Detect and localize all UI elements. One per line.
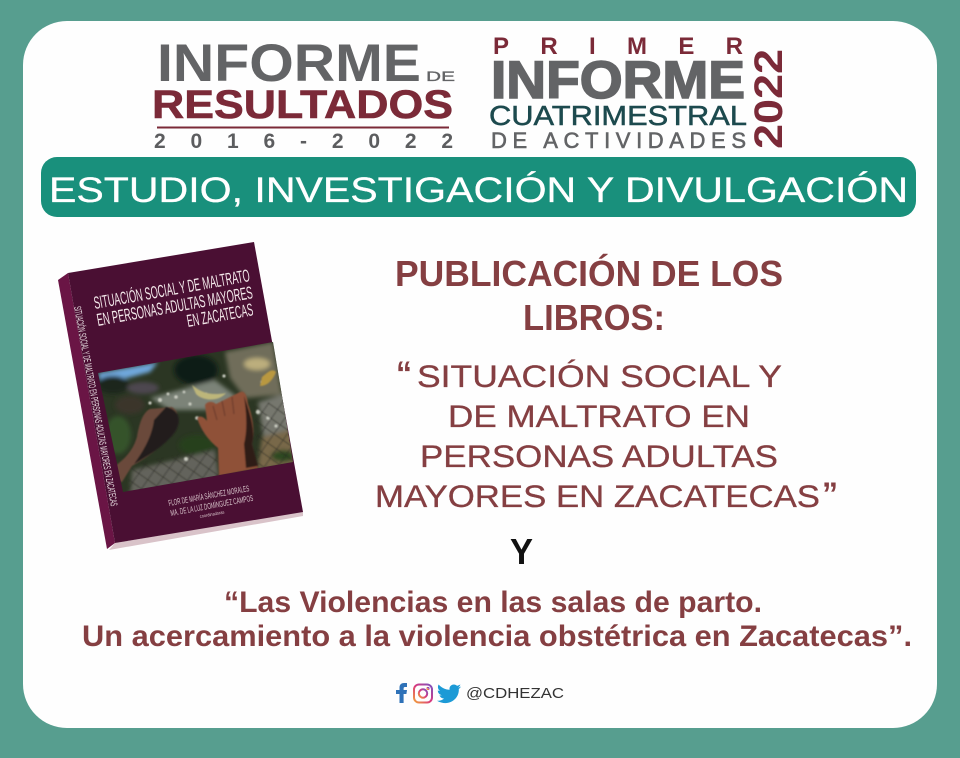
leaf [192,385,226,400]
logo: primer informe cuatrimestral [489,33,791,153]
left hand [114,407,178,482]
book title one: PERSONAS ADULTAS [420,438,778,474]
logo: informe de resultados [152,34,455,153]
right hand [197,392,258,476]
book authors [168,483,254,519]
book cover: SITUACIÓN SOCIAL Y DE MALTRATO EN PERSONAS ADULTAS MAYORES EN ZACATECAS [71,305,121,507]
logo: informe de resultados: DE [426,68,455,84]
logo: primer informe cuatrimestral: DE ACTIVIDADES [491,128,746,153]
book title one: MAYORES EN ZACATECAS [375,478,820,514]
social footer [396,683,564,703]
book title two: Un acercamiento a la violencia obstétrica en Zacatecas”. [82,620,912,653]
book title two: “Las Violencias en las salas de parto. [224,586,762,619]
rubble speckle [148,374,278,461]
heading: publicación de los libros: LIBROS: [523,297,665,338]
book pages [109,511,303,550]
section banner: ESTUDIO, INVESTIGACIÓN Y DIVULGACIÓN [49,171,908,210]
icon: twitter [437,684,461,703]
heading: publicación de los libros: PUBLICACIÓN DE LOS [395,252,783,294]
book authors: FLOR DE MARÍA SÁNCHEZ MORALES [168,483,250,508]
icon: instagram [414,684,432,702]
book title two [82,586,912,653]
book authors: MA. DE LA LUZ DOMÍNGUEZ CAMPOS [170,493,254,518]
book front [68,242,303,543]
logo: informe de resultados: 2016-2022 [154,130,453,153]
book title: EN ZACATECAS [185,299,255,331]
icon: facebook [396,683,407,703]
book title [92,264,255,331]
logo: primer informe cuatrimestral: INFORME [491,51,745,110]
book title one: DE MALTRATO EN [448,398,750,434]
logo: primer informe cuatrimestral: 2022 [747,49,791,149]
book authors: coordinadoras [199,509,225,519]
logo: primer informe cuatrimestral: PRIMER [493,33,743,60]
heading: publicación de los libros [395,252,783,338]
book title one: SITUACIÓN SOCIAL Y [417,358,782,394]
book title: SITUACIÓN SOCIAL Y DE MALTRATO [92,264,251,313]
book photo [98,342,293,492]
logo: informe de resultados: INFORME [157,34,421,93]
book title one: ” [822,476,838,512]
conjunction Y: Y [510,531,533,572]
book cover [58,242,303,550]
chain fence [130,450,219,489]
book title one: “ [396,355,412,391]
logo: informe de resultados: RESULTADOS [152,83,453,127]
book title one [375,355,838,514]
section banner [41,157,916,217]
logo: primer informe cuatrimestral: CUATRIMESTRAL [489,100,747,131]
book title: EN PERSONAS ADULTAS MAYORES [95,282,254,330]
book spine [58,273,115,549]
handle: @CDHEZAC [466,685,564,702]
